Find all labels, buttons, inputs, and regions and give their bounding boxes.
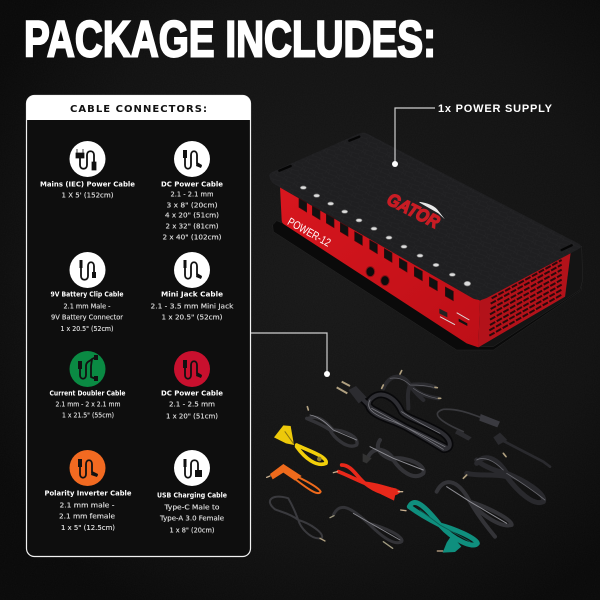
label: power supply: 1x POWER SUPPLY (438, 103, 553, 115)
card: dc power cable 2.1-2.5: 2.1 - 2.5 mm (169, 400, 215, 408)
card: dc power cable 2.1-2.5 (161, 351, 223, 420)
side vents (489, 260, 562, 336)
card: mini jack cable: Mini Jack Cable (161, 290, 223, 298)
top plate slots (279, 137, 572, 250)
cable: black multi-plug (382, 371, 441, 408)
cables (267, 371, 550, 553)
base plate (273, 221, 582, 350)
leader line: power supply (392, 108, 435, 167)
red front panel (280, 187, 480, 347)
card: usb charging cable: Type-C Male to (163, 502, 220, 512)
cable: orange (267, 464, 321, 493)
leader line: cables (251, 333, 330, 377)
card: usb charging cable: 1 x 8" (20cm) (170, 526, 215, 534)
card: polarity inverter cable (44, 450, 132, 532)
panel: cable connectors (26, 96, 250, 556)
card: mains power cable: Mains (IEC) Power Cable (40, 180, 135, 188)
knobs (366, 267, 389, 286)
card: mains power cable: 1 X 5' (152cm) (62, 190, 114, 200)
card: usb charging cable: USB Charging Cable (157, 490, 227, 500)
card: 9v battery clip cable: 1 x 20.5" (52cm) (60, 324, 114, 333)
cable: gray center (363, 440, 424, 476)
card: current doubler cable: 2.1 mm - 2 x 2.1 mm (56, 400, 120, 408)
icon: red dc cable (174, 351, 210, 387)
card: 9v battery clip cable (50, 252, 124, 333)
power supply unit (269, 133, 583, 350)
icon: dc cable (174, 141, 210, 177)
title: PACKAGE INCLUDES: (24, 10, 436, 68)
card: dc power cable 2.1-2.1: 4 x 20" (51cm) (165, 210, 219, 220)
logo: gator: GATOR (384, 189, 443, 232)
card: polarity inverter cable: 2.1 mm female (59, 512, 116, 520)
cable: teal (401, 503, 477, 553)
card: polarity inverter cable: 2.1 mm male - (60, 500, 115, 510)
card: dc power cable 2.1-2.5: 1 x 20" (51cm) (166, 412, 218, 420)
panel header (26, 96, 250, 120)
icon: battery clip cable (70, 252, 106, 288)
card: dc power cable 2.1-2.1: 2 x 32" (81cm) (166, 222, 219, 230)
rear bracket (478, 246, 583, 347)
cable: gray left upper (307, 407, 357, 446)
icon: doubler cable (70, 351, 106, 387)
card: 9v battery clip cable: 9V Battery Clip Cable (50, 290, 124, 298)
cable: yellow (274, 425, 326, 464)
card: mini jack cable: 2.1 - 3.5 mm Mini Jack (150, 302, 234, 310)
card: mains power cable (40, 141, 135, 200)
cable: usb adapter (437, 409, 500, 441)
card: usb charging cable (157, 450, 227, 534)
card: 9v battery clip cable: 2.1 mm Male - (64, 302, 111, 310)
cable: right-angle lead (493, 433, 550, 467)
card: polarity inverter cable: Polarity Inverter Cable (44, 488, 132, 498)
icon: polarity cable (70, 450, 106, 486)
card: mini jack cable (150, 252, 234, 322)
dc output ports (299, 198, 453, 301)
card: current doubler cable (50, 351, 126, 420)
icon: usb cable (174, 450, 210, 486)
card: 9v battery clip cable: 9V Battery Connector (51, 312, 123, 322)
card: dc power cable 2.1-2.5: DC Power Cable (161, 388, 223, 398)
panel heading: CABLE CONNECTORS: (70, 104, 207, 115)
icon: mains cable (70, 141, 106, 177)
label: power-12: POWER-12 (285, 216, 332, 250)
cable: red (333, 465, 403, 501)
card: dc power cable 2.1-2.1: DC Power Cable (161, 180, 223, 188)
card: polarity inverter cable: 1 x 5" (12.5cm) (61, 523, 115, 532)
cable: black bundle right (463, 453, 545, 503)
red side panel (478, 253, 571, 347)
card: usb charging cable: Type-A 3.0 Female (159, 514, 225, 522)
cable: gray bottom middle (330, 507, 402, 548)
card: dc power cable 2.1-2.1 (161, 141, 223, 242)
card: current doubler cable: 1 x 21.5" (55cm) (62, 410, 114, 420)
cable: gray bottom left (270, 497, 325, 541)
top screws (300, 186, 471, 286)
top plate (269, 133, 581, 300)
cable: mains (337, 382, 450, 449)
card: current doubler cable: Current Doubler Cable (50, 388, 126, 398)
usb port and switches (439, 309, 469, 326)
card: dc power cable 2.1-2.1: 2 x 40" (102cm) (162, 232, 222, 242)
icon: mini jack cable (174, 252, 210, 288)
card: mini jack cable: 1 x 20.5" (52cm) (162, 312, 223, 322)
card: dc power cable 2.1-2.1: 3 x 8" (20cm) (166, 200, 218, 210)
card: dc power cable 2.1-2.1: 2.1 - 2.1 mm (170, 190, 214, 198)
cable: gray lower right (437, 482, 512, 537)
